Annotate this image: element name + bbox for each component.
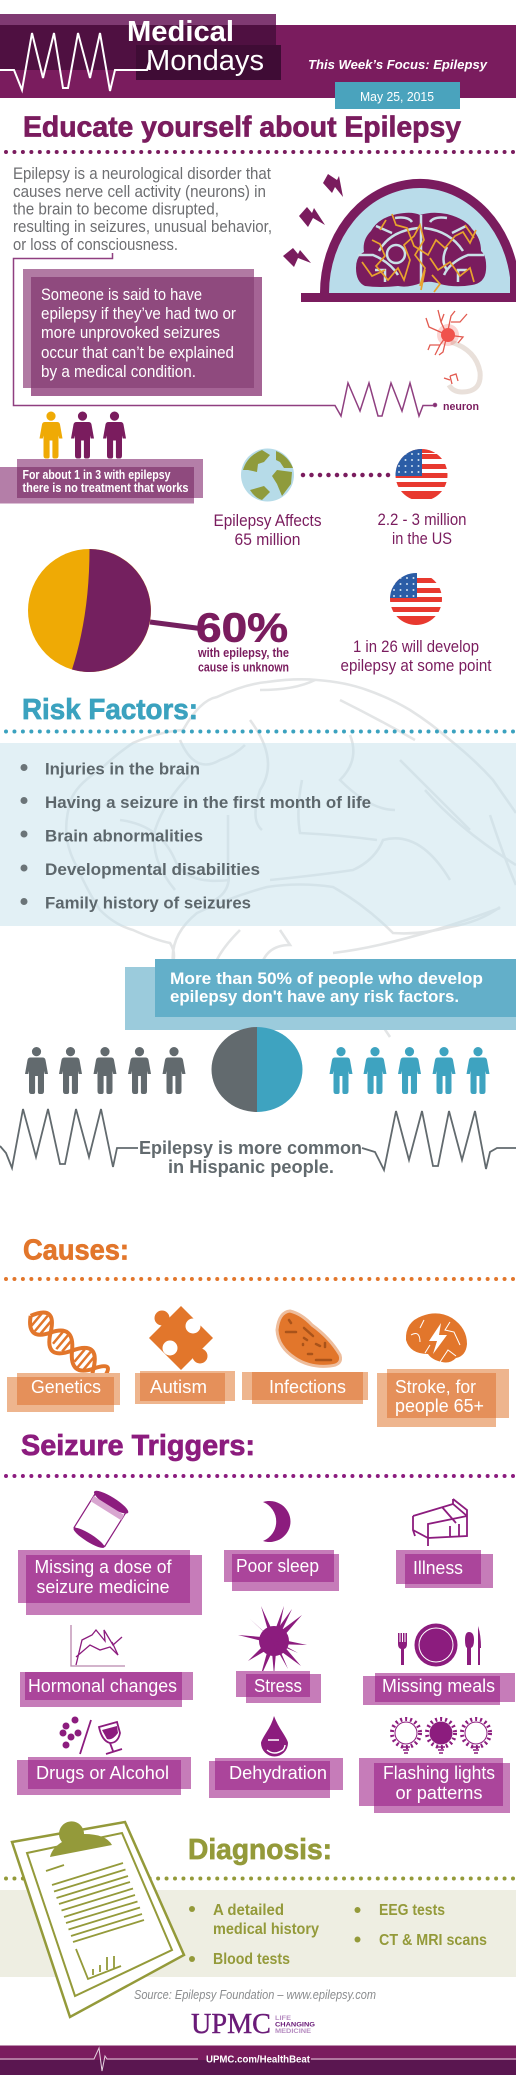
label: Missing meals [363,1673,515,1705]
icon: water drop [261,1716,288,1756]
ecg lines gray [0,1109,516,1170]
triggers dotted divider [6,1474,516,1478]
label: Stress [236,1671,321,1703]
label: Flashing lights: Flashing lights [383,1763,495,1783]
title: Educate yourself about Epilepsy [23,112,461,144]
icon: pills and wine glass [60,1716,122,1754]
footer band [0,2046,516,2075]
label: Missing a dose [18,1550,202,1615]
stat: 60% unknown cause: cause is unknown [198,660,289,674]
definition callout: occur that can’t be explained [41,344,234,362]
icon: brain under dome [301,179,516,302]
stat: US total: 2.2 - 3 million [378,511,466,529]
header banner [0,14,516,98]
footer band: UPMC.com/HealthBeat [206,2054,311,2066]
UPMC logo [191,2009,315,2040]
list: diagnosis tests: Blood tests [213,1951,290,1968]
panel: risk factors list [0,743,516,926]
icon: puzzle piece [149,1306,213,1370]
UPMC logo: MEDICINE [275,2028,312,2035]
heading: Diagnosis: Diagnosis: [188,1834,332,1866]
label: Drugs or Alcohol [17,1757,191,1795]
title dotted divider [6,150,516,154]
definition callout: Someone is said to have [41,286,202,304]
label: Poor sleep: Poor sleep [236,1556,319,1576]
panel: risk factors list: Having a seizure in the first month of life [45,793,371,812]
diagnosis dotted divider [6,1876,516,1880]
stat: US total [378,511,466,548]
label: Drugs or Alcohol: Drugs or Alcohol [36,1763,169,1783]
callout: no risk factors [125,959,516,1030]
text: more common in Hispanic people: Epilepsy is more common [139,1137,362,1158]
UPMC logo: CHANGING [275,2022,315,2028]
icon: pill bottle [70,1487,131,1552]
UPMC logo: LIFE [275,2015,292,2022]
pie chart: 60 percent [28,549,200,672]
source line: Source: Epilepsy Foundation – www.epilepsy.com [134,1988,376,2002]
label: Dehydration [209,1758,343,1798]
label: Autism [135,1371,235,1404]
heading: Risk Factors: Risk Factors: [22,694,198,726]
date badge: May 25, 2015 [360,89,434,104]
label: Autism: Autism [150,1377,207,1397]
risk dotted divider [6,730,516,734]
list: diagnosis tests: EEG tests [379,1902,445,1919]
label: Infections: Infections [269,1377,346,1397]
icon: hormone chart [71,1625,125,1666]
background brain watermark [66,679,516,1037]
definition callout: by a medical condition. [41,363,196,381]
icon: clipboard [12,1821,184,2017]
heading: Causes: Causes: [23,1234,129,1266]
label: Hormonal changes [20,1672,193,1707]
label: Hormonal changes: Hormonal changes [28,1676,177,1696]
icon: seizure lightning bolts [283,174,343,267]
intro paragraph: or loss of consciousness. [13,235,178,254]
stat: 1 in 26 [340,638,492,675]
list: diagnosis tests: medical history [213,1921,319,1938]
callout: no treatment: For about 1 in 3 with epilepsy [22,467,171,482]
label: Flashing lights [359,1758,510,1813]
label: Poor sleep [224,1550,339,1591]
pie chart: half and half [212,1027,302,1112]
label: Stroke: people 65+ [395,1396,484,1416]
label: Missing a dose: seizure medicine [36,1577,170,1597]
list: diagnosis tests [189,1902,487,1968]
icon: DNA [22,1306,113,1388]
icon: bed [413,1499,467,1546]
icon: flashing light bulbs [392,1719,490,1753]
panel: diagnosis band [0,1890,516,1977]
heading: Seizure Triggers: Seizure Triggers: [21,1430,255,1462]
text: more common in Hispanic people: in Hispanic people. [168,1156,334,1177]
label: Stroke [377,1369,509,1427]
UPMC logo: UPMC [191,2009,271,2040]
label: Illness [396,1550,493,1588]
icon: moon [263,1501,290,1542]
intro paragraph: resulting in seizures, unusual behavior, [13,217,272,236]
panel: risk factors list: Developmental disabilities [45,860,260,879]
label: Missing a dose: Missing a dose of [34,1557,172,1577]
label: Missing meals: Missing meals [382,1676,495,1696]
intro paragraph: Epilepsy is a neurological disorder that [13,164,271,183]
callout: no risk factors: More than 50% of people who develop [170,969,483,988]
header banner: Mondays [146,45,264,77]
definition callout: epilepsy if they’ve had two or [41,305,236,323]
panel: risk factors list: Injuries in the brain [45,760,200,778]
dotted link globe to flag [303,473,389,477]
icon: plate and cutlery [398,1624,481,1666]
callout: no treatment [0,459,203,504]
icon: stroke brain [406,1313,467,1362]
neuron label: neuron [443,401,479,413]
stat: 1 in 26: 1 in 26 will develop [353,638,479,656]
icon: blue people [330,1047,490,1094]
label: Stress: Stress [254,1676,302,1696]
stat: 65 million: Epilepsy Affects [214,512,322,530]
stat: 60% unknown cause: with epilepsy, the [197,646,289,660]
label: Dehydration: Dehydration [229,1763,327,1783]
icon: people 1 in 3 [40,412,126,458]
stat: 65 million [214,512,322,549]
stat: 65 million: 65 million [234,531,300,549]
panel: risk factors list: Brain abnormalities [45,826,203,846]
icon: gray people [25,1047,186,1094]
text: more common in Hispanic people [139,1137,362,1177]
label: Stroke: Stroke, for [395,1377,476,1397]
connector line to neuron [14,253,436,416]
date badge [335,82,460,109]
definition callout [23,269,262,396]
icon: globe [241,448,294,502]
icon: US flag small stat [390,573,442,625]
icon: neuron [426,310,480,392]
header banner: Medical [127,16,234,48]
stat: US total: in the US [392,530,452,548]
label: Flashing lights: or patterns [396,1783,482,1803]
definition callout: more unprovoked seizures [41,324,220,342]
icon: stress starburst [238,1606,307,1678]
intro paragraph: causes nerve cell activity (neurons) in [13,182,266,201]
causes dotted divider [6,1277,516,1281]
header banner: This Week’s Focus: Epilepsy [308,57,488,72]
icon: infection bacteria [277,1311,341,1366]
stat: 60% unknown cause [196,604,289,674]
list: diagnosis tests: A detailed [213,1902,284,1919]
intro paragraph [13,164,272,254]
stat: 60% unknown cause: 60% [196,604,288,650]
intro paragraph: the brain to become disrupted, [13,200,219,218]
label: Genetics: Genetics [31,1377,101,1397]
icon: US flag [395,449,448,501]
list: diagnosis tests: CT & MRI scans [379,1932,487,1949]
label: Illness: Illness [413,1558,463,1578]
callout: no treatment: there is no treatment that works [22,480,188,495]
stat: 1 in 26: epilepsy at some point [340,657,492,675]
label: Infections [242,1372,368,1404]
panel: risk factors list: Family history of seizures [45,894,251,912]
label: Genetics [7,1373,120,1412]
callout: no risk factors: epilepsy don't have any risk factors. [170,987,459,1006]
